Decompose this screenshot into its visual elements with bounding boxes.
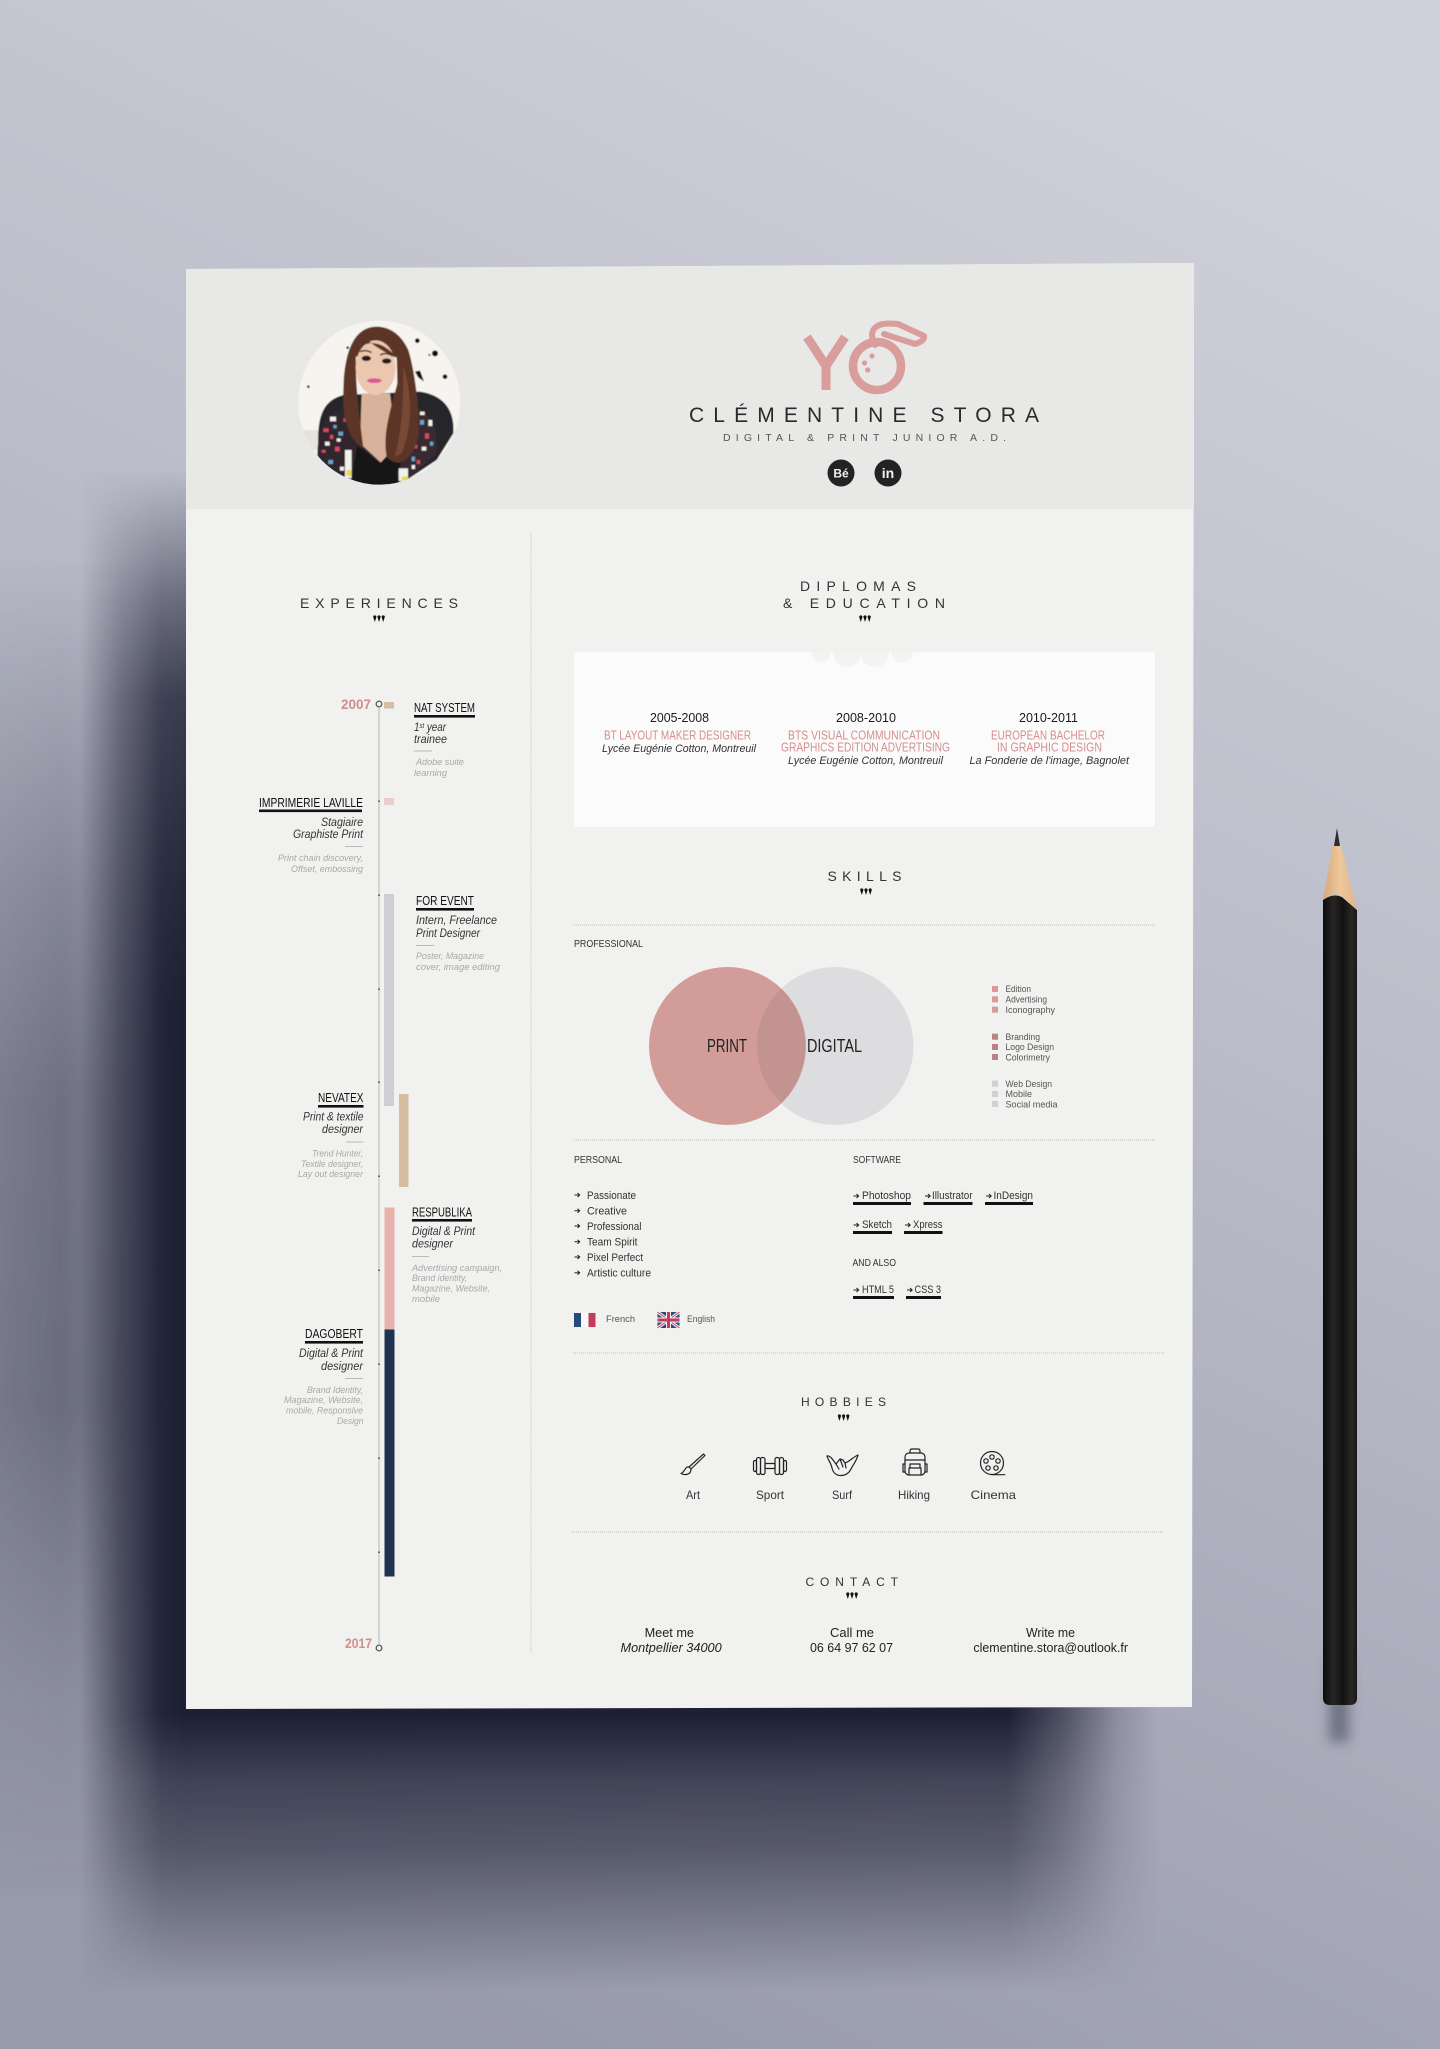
experience: dagobert (284, 1326, 364, 1427)
experience: for event: Intern, Freelance (416, 915, 497, 927)
legend: Logo Design (1006, 1042, 1054, 1052)
name: CLÉMENTINE STORA (689, 404, 1039, 427)
heading: hobbies (801, 1395, 886, 1421)
heading: skills (828, 868, 902, 895)
experience: for event: FOR EVENT (416, 893, 474, 908)
experience: dagobert: mobile, Responsive (286, 1406, 363, 1416)
experience: respublika: designer (412, 1238, 454, 1250)
panel: experiences (259, 595, 502, 1651)
experience: nat system: 1 (414, 722, 420, 734)
contact: meet me (620, 1625, 722, 1655)
experience: imprimerie laville: IMPRIMERIE LAVILLE (259, 795, 363, 810)
heading: diplomas and education: & EDUCATION (783, 595, 945, 611)
icon: linkedin: in (882, 465, 894, 481)
experience: nevatex (298, 1090, 364, 1180)
hobby labels: Surf (832, 1488, 853, 1502)
job title: DIGITAL & PRINT JUNIOR A.D. (723, 432, 1006, 444)
personal skills: Team Spirit (587, 1236, 638, 1248)
icon: hiking backpack (903, 1449, 927, 1475)
experience: nevatex: Textile designer, (301, 1159, 363, 1170)
personal skills: Creative (587, 1206, 627, 1218)
contact: call me (810, 1625, 893, 1655)
experience: dagobert: Design (337, 1416, 364, 1427)
diploma 2010-2011: 2010-2011 (1019, 710, 1078, 725)
panel: contact (620, 1575, 1129, 1655)
experience: for event (416, 893, 501, 973)
experience: nevatex: designer (322, 1124, 364, 1136)
year 2007: 2007 (341, 696, 371, 712)
paper shadow (0, 470, 1160, 1990)
experience: nevatex: Lay out designer (298, 1169, 364, 1180)
legend: Edition (1006, 984, 1031, 994)
software skills: HTML 5 (862, 1284, 894, 1296)
software skills: CSS 3 (914, 1284, 941, 1296)
contact: write me (973, 1625, 1129, 1655)
hobby labels: Art (686, 1488, 701, 1502)
experience: for event: cover, image editing (416, 962, 501, 973)
experience: nat system: year (424, 722, 447, 734)
languages (574, 1312, 715, 1328)
heading: contact: CONTACT (806, 1575, 899, 1589)
software skills: Photoshop (862, 1190, 911, 1202)
contact: write me: Write me (1026, 1625, 1075, 1640)
contact: call me: Call me (830, 1625, 874, 1640)
experience: imprimerie laville (259, 795, 364, 875)
hobby labels: Cinema (971, 1488, 1016, 1502)
experience: respublika: Digital & Print (412, 1226, 476, 1238)
experience: nevatex: Trend Hunter, (312, 1148, 363, 1160)
panel: skills (574, 868, 1155, 1328)
experience: nat system: NAT SYSTEM (414, 700, 475, 715)
software skills: InDesign (994, 1190, 1033, 1202)
heading: diplomas and education: DIPLOMAS (800, 578, 916, 594)
software skills: SOFTWARE (853, 1154, 901, 1166)
legend: Colorimetry (1006, 1052, 1050, 1062)
software skills: AND ALSO (852, 1257, 896, 1269)
experience: for event: Poster, Magazine (416, 951, 484, 962)
legend: Branding (1006, 1032, 1040, 1042)
personal skills: Artistic culture (587, 1268, 651, 1280)
experience: dagobert: Digital & Print (299, 1348, 364, 1360)
software skills: Sketch (862, 1219, 892, 1231)
experience: respublika: RESPUBLIKA (412, 1204, 472, 1220)
experience: nat system: learning (414, 768, 448, 779)
contact: meet me: Montpellier 34000 (620, 1640, 722, 1655)
diploma 2005-2008: 2005-2008 (650, 710, 709, 725)
legend: Mobile (1006, 1089, 1032, 1099)
diploma 2005-2008: BT LAYOUT MAKER DESIGNER (604, 728, 751, 742)
venn diagram: PRINT (707, 1036, 747, 1056)
white card with scallop notch (574, 636, 1155, 827)
languages: French (606, 1314, 635, 1324)
heading: experiences (300, 595, 458, 622)
experience: respublika (411, 1204, 502, 1305)
experience: respublika: Magazine, Website, (412, 1284, 490, 1294)
personal skills: PERSONAL (574, 1154, 622, 1166)
legend: Iconography (1006, 1005, 1055, 1015)
diploma 2008-2010: GRAPHICS EDITION ADVERTISING (781, 740, 950, 754)
experience: imprimerie laville: Offset, embossing (291, 864, 364, 875)
icon: uk flag (658, 1312, 680, 1328)
contact: write me: clementine.stora@outlook.fr (973, 1640, 1129, 1655)
software skills: Xpress (913, 1219, 943, 1231)
experience: imprimerie laville: Stagiaire (321, 817, 363, 829)
header band (186, 263, 1194, 509)
experience: nevatex: NEVATEX (318, 1090, 364, 1105)
column divider (530, 533, 532, 1652)
bars (384, 702, 408, 1576)
experience: nat system (414, 700, 475, 779)
icon: behance: Bé (833, 466, 849, 480)
heading: contact (806, 1575, 899, 1599)
icon: french flag (574, 1312, 596, 1327)
hobby labels: Hiking (898, 1488, 930, 1502)
legend (992, 984, 1058, 1110)
venn diagram: DIGITAL (807, 1036, 862, 1056)
legend: Web Design (1006, 1079, 1052, 1089)
diploma 2008-2010: 2008-2010 (836, 710, 896, 725)
experience: respublika: mobile (412, 1294, 440, 1305)
personal skills (574, 1154, 651, 1280)
legend: Social media (1006, 1100, 1058, 1110)
heading: diplomas and education (783, 578, 945, 622)
experience: imprimerie laville: Graphiste Print (293, 829, 364, 841)
icon: linkedin (874, 460, 902, 486)
experience: dagobert: Magazine, Website, (284, 1395, 363, 1406)
heading: hobbies: HOBBIES (801, 1395, 886, 1409)
panel: hobbies (681, 1395, 1016, 1502)
experience: respublika: Brand identity, (412, 1273, 467, 1284)
experience: respublika: Advertising campaign, (411, 1263, 502, 1274)
diploma 2008-2010: BTS VISUAL COMMUNICATION (788, 728, 940, 742)
icon: surf shaka hand (827, 1455, 858, 1476)
heading: experiences: EXPERIENCES (300, 595, 458, 611)
experience: nevatex: Print & textile (303, 1112, 364, 1124)
pencil (1323, 828, 1357, 1742)
languages: English (687, 1314, 715, 1324)
experience: dagobert: Brand Identity, (307, 1385, 363, 1396)
icon: sport dumbbell (754, 1458, 786, 1474)
personal skills: Professional (587, 1221, 642, 1233)
experience: dagobert: designer (321, 1361, 364, 1373)
experience: imprimerie laville: Print chain discovery, (278, 853, 363, 864)
icon: behance (828, 460, 854, 486)
experience: nat system: st (419, 723, 425, 730)
diploma 2010-2011: La Fonderie de l'image, Bagnolet (970, 755, 1130, 767)
diploma 2010-2011 (970, 710, 1130, 767)
venn diagram (649, 967, 914, 1125)
portrait photo (297, 320, 463, 487)
diploma 2008-2010: Lycée Eugénie Cotton, Montreuil (788, 755, 944, 767)
year 2017: 2017 (345, 1635, 372, 1651)
diploma 2010-2011: IN GRAPHIC DESIGN (997, 740, 1102, 754)
icon: art brush (681, 1454, 705, 1475)
diploma 2010-2011: EUROPEAN BACHELOR (991, 728, 1105, 742)
contact: call me: 06 64 97 62 07 (810, 1640, 893, 1655)
software skills (852, 1154, 1033, 1299)
experience: nat system: Adobe suite (415, 757, 464, 768)
icon: cinema film reel (980, 1452, 1005, 1475)
software skills: Illustrator (932, 1190, 973, 1202)
legend: Advertising (1006, 994, 1047, 1004)
logo YO with leaf (807, 324, 924, 390)
diploma 2005-2008 (602, 710, 757, 755)
personal skills: Pixel Perfect (587, 1252, 643, 1264)
experience: for event: Print Designer (416, 928, 481, 940)
experience: nat system: trainee (414, 734, 447, 746)
diploma 2005-2008: Lycée Eugénie Cotton, Montreuil (602, 743, 757, 755)
contact: meet me: Meet me (645, 1625, 694, 1640)
personal skills: Passionate (587, 1190, 636, 1202)
experience: dagobert: DAGOBERT (305, 1326, 363, 1341)
diploma 2008-2010 (781, 710, 950, 767)
hobby labels (686, 1488, 1016, 1502)
heading: skills: SKILLS (828, 868, 902, 884)
timeline axis (376, 701, 382, 1651)
hobby labels: Sport (756, 1488, 785, 1502)
panel: diplomas and education (574, 578, 1155, 827)
paper sheet (186, 263, 1194, 1709)
label: professional: PROFESSIONAL (574, 938, 643, 950)
